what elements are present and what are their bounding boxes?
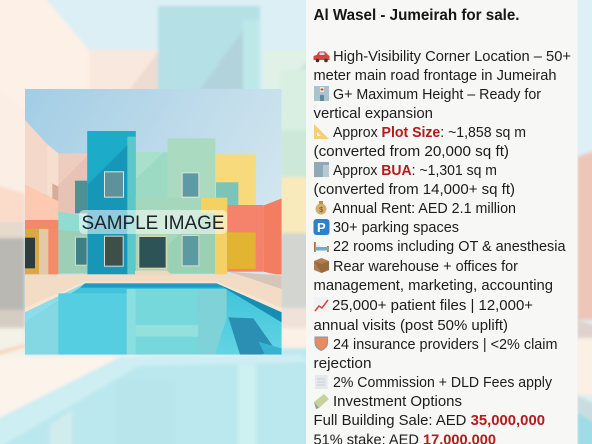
feature: investment options: Investment Options xyxy=(333,393,462,410)
heading: Al Wasel - Jumeirah for sale. xyxy=(314,7,520,24)
feature: rent: Annual Rent: AED 2.1 million xyxy=(332,200,516,217)
icon: money bag: $ xyxy=(319,207,323,214)
price: full building: Full Building Sale: AED 35,000,000 xyxy=(314,412,545,429)
feature: rooms: 22 rooms including OT & anesthesia xyxy=(333,238,566,255)
text panel: (converted from 14,000+ sq ft) xyxy=(314,181,515,198)
text panel: rejection xyxy=(314,355,372,372)
icon: chart xyxy=(314,297,329,312)
text panel xyxy=(306,0,578,444)
feature: location: High-Visibility Corner Location – 50+ xyxy=(333,48,571,65)
icon: bed xyxy=(314,242,329,252)
text panel: annual visits (post 50% uplift) xyxy=(314,317,508,334)
icon: flying money xyxy=(314,394,329,409)
icon: parking xyxy=(314,219,330,235)
text panel: meter main road frontage in Jumeirah xyxy=(314,67,556,84)
feature: BUA: Approx BUA: ~1,301 sq m xyxy=(333,162,497,179)
icon: money bag xyxy=(316,201,326,214)
feature: plot size: Approx Plot Size: ~1,858 sq m xyxy=(333,124,526,141)
icon: office building xyxy=(314,162,329,177)
text panel: vertical expansion xyxy=(314,105,433,122)
icon: red car xyxy=(314,52,330,62)
icon: triangle ruler xyxy=(314,124,329,139)
icon: shield xyxy=(315,337,328,350)
feature: warehouse: Rear warehouse + offices for xyxy=(333,258,518,275)
feature: parking: 30+ parking spaces xyxy=(333,219,459,236)
feature: insurance: 24 insurance providers | <2% claim xyxy=(333,336,558,353)
feature: patient files: 25,000+ patient files | 12,000+ xyxy=(332,297,533,314)
icon: box xyxy=(314,258,329,273)
icon: parking: P xyxy=(317,220,326,235)
feature: height: G+ Maximum Height – Ready for xyxy=(333,86,541,103)
text panel: management, marketing, accounting xyxy=(314,277,553,294)
text panel: (converted from 20,000 sq ft) xyxy=(314,143,509,160)
feature: commission: 2% Commission + DLD Fees apply xyxy=(333,374,552,391)
icon: document xyxy=(315,375,328,389)
icon: hospital xyxy=(314,86,329,101)
sample image watermark: SAMPLE IMAGE xyxy=(82,212,224,234)
sample photo of colourful villa with pool xyxy=(25,89,282,355)
